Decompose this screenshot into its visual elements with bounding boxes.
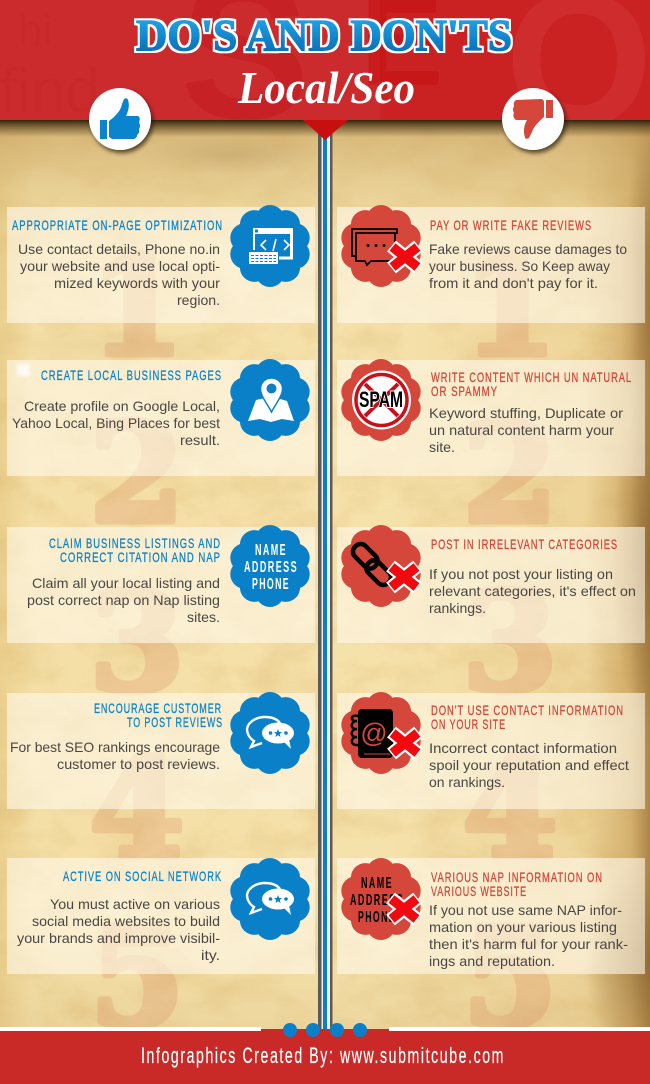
body text: site. <box>429 439 455 455</box>
ghost numerals right: 3 <box>463 563 557 723</box>
center timeline <box>318 120 332 1030</box>
body text: Create profile on Google Local, <box>24 398 220 414</box>
body text: post correct nap on Nap listing <box>27 592 220 608</box>
body text: un natural content harm your <box>429 422 614 438</box>
body text: then it's harm ful for your rank- <box>429 936 628 952</box>
ghost numerals left: 1 <box>90 227 184 387</box>
body text <box>17 896 220 963</box>
body text: If you not post your listing on <box>429 566 613 582</box>
icon: code window <box>230 205 310 287</box>
ghost numerals left: 2 <box>90 394 184 554</box>
icon: crossed name address phone: ADDRESS <box>350 892 404 909</box>
heading: encourage reviews: TO POST REVIEWS <box>127 714 223 730</box>
body text: relevant categories, it's effect on <box>429 583 636 599</box>
body text <box>429 405 623 455</box>
panel: do 1 <box>7 205 315 323</box>
body text: social media websites to build <box>32 913 220 929</box>
panel: don't 5 <box>337 858 645 974</box>
body text <box>429 740 629 790</box>
icon: thumbs down <box>502 88 564 150</box>
panel: don't 4 <box>337 692 645 809</box>
body text: Fake reviews cause damages to <box>429 241 627 257</box>
body text <box>429 902 628 969</box>
ghost numerals left: 3 <box>90 563 184 723</box>
main title: DO'S AND DON'TS <box>136 11 512 60</box>
icon: spam prohibited: SPAM <box>359 387 403 412</box>
body text: ings and reputation. <box>429 953 555 969</box>
body text <box>429 566 636 616</box>
body text: your website and use local opti- <box>20 258 220 274</box>
body text: Yahoo Local, Bing Places for best <box>12 415 220 431</box>
header banner: find <box>0 57 100 126</box>
body text: Use contact details, Phone no.in <box>18 241 220 257</box>
body text <box>27 575 220 625</box>
highlight speck <box>17 364 30 376</box>
heading: social network: ACTIVE ON SOCIAL NETWORK <box>63 868 222 884</box>
body text: customer to post reviews. <box>57 756 220 772</box>
ghost numerals left <box>90 227 184 1058</box>
body text: spoil your reputation and effect <box>429 757 629 773</box>
panel: don't 2 <box>337 359 645 476</box>
icon: name address phone: PHONE <box>252 576 290 593</box>
icon: name address phone <box>230 525 310 607</box>
ghost numerals right: 5 <box>463 898 557 1058</box>
body text: Incorrect contact information <box>429 740 617 756</box>
body text: Keyword stuffing, Duplicate or <box>429 405 623 421</box>
heading: spammy content: OR SPAMMY <box>431 383 498 399</box>
heading: contact information <box>431 702 624 732</box>
icon: chat bubbles <box>230 858 310 940</box>
heading: various NAP: VARIOUS WEBSITE <box>431 883 527 899</box>
icon: crossed name address phone: NAME <box>361 875 393 892</box>
icon: address book <box>341 692 421 774</box>
ghost numerals right: 1 <box>463 227 557 387</box>
body text: result. <box>180 432 220 448</box>
heading: claim listings: CORRECT CITATION AND NAP <box>60 549 221 565</box>
body text: ity. <box>201 947 220 963</box>
ghost numerals right: 4 <box>463 729 557 889</box>
header banner: hi <box>18 6 52 55</box>
panel: do 3 <box>7 525 315 643</box>
body text: mation on your various listing <box>429 919 617 935</box>
body text: For best SEO rankings encourage <box>10 739 220 755</box>
body text: your brands and improve visibil- <box>17 930 220 946</box>
heading: various NAP <box>431 869 603 899</box>
heading: on-page optimization: APPROPRIATE ON-PAGE OPTIMIZATION <box>12 217 223 233</box>
footer <box>0 1023 650 1084</box>
heading: spammy content <box>431 369 632 399</box>
icon: crossed name address phone: PHONE <box>358 909 396 926</box>
ghost numerals left: 5 <box>90 898 184 1058</box>
heading: contact information: ON YOUR SITE <box>431 716 506 732</box>
icon: spam prohibited <box>341 359 421 441</box>
body text <box>18 241 220 308</box>
icon: crossed message <box>341 205 421 287</box>
body text: If you not use same NAP infor- <box>429 902 622 918</box>
body text: mized keywords with your <box>54 275 220 291</box>
body text: You must active on various <box>50 896 220 912</box>
icon: thumbs up <box>89 88 151 150</box>
panel: do 4 <box>7 692 315 809</box>
panel: don't 1 <box>337 205 645 323</box>
body text <box>10 739 220 772</box>
timeline pointer <box>303 120 348 140</box>
heading: local business pages: CREATE LOCAL BUSINESS PAGES <box>41 367 222 383</box>
body text: region. <box>177 292 220 308</box>
icon: crossed name address phone <box>341 858 421 940</box>
icon: map pin <box>230 359 310 441</box>
ghost numerals right <box>463 227 557 1058</box>
icon: name address phone: ADDRESS <box>244 559 298 576</box>
icon: crossed chain <box>341 525 421 607</box>
body text <box>429 241 627 291</box>
ghost numerals right: 2 <box>463 394 557 554</box>
pagination dots <box>283 1023 367 1037</box>
body text: sites. <box>187 609 220 625</box>
subtitle: Local/Seo <box>237 63 415 113</box>
heading: encourage reviews: ENCOURAGE CUSTOMER <box>94 700 222 716</box>
body text: from it and don't pay for it. <box>429 275 598 291</box>
heading: claim listings: CLAIM BUSINESS LISTINGS AND <box>49 535 221 551</box>
panel: do 2 <box>7 359 315 476</box>
body text <box>12 398 220 448</box>
heading: claim listings <box>49 535 221 565</box>
panel: don't 3 <box>337 525 645 643</box>
body text: on rankings. <box>429 774 505 790</box>
icon: name address phone: NAME <box>255 542 287 559</box>
panel: do 5 <box>7 858 315 974</box>
icon: address book: @ <box>360 718 388 748</box>
body text: Claim all your local listing and <box>32 575 220 591</box>
icon: chat bubbles <box>230 692 310 774</box>
ghost numerals left: 4 <box>90 729 184 889</box>
header banner <box>0 0 650 140</box>
body text: your business. So Keep away <box>429 258 610 274</box>
heading: encourage reviews <box>94 700 223 730</box>
body text: rankings. <box>429 600 486 616</box>
